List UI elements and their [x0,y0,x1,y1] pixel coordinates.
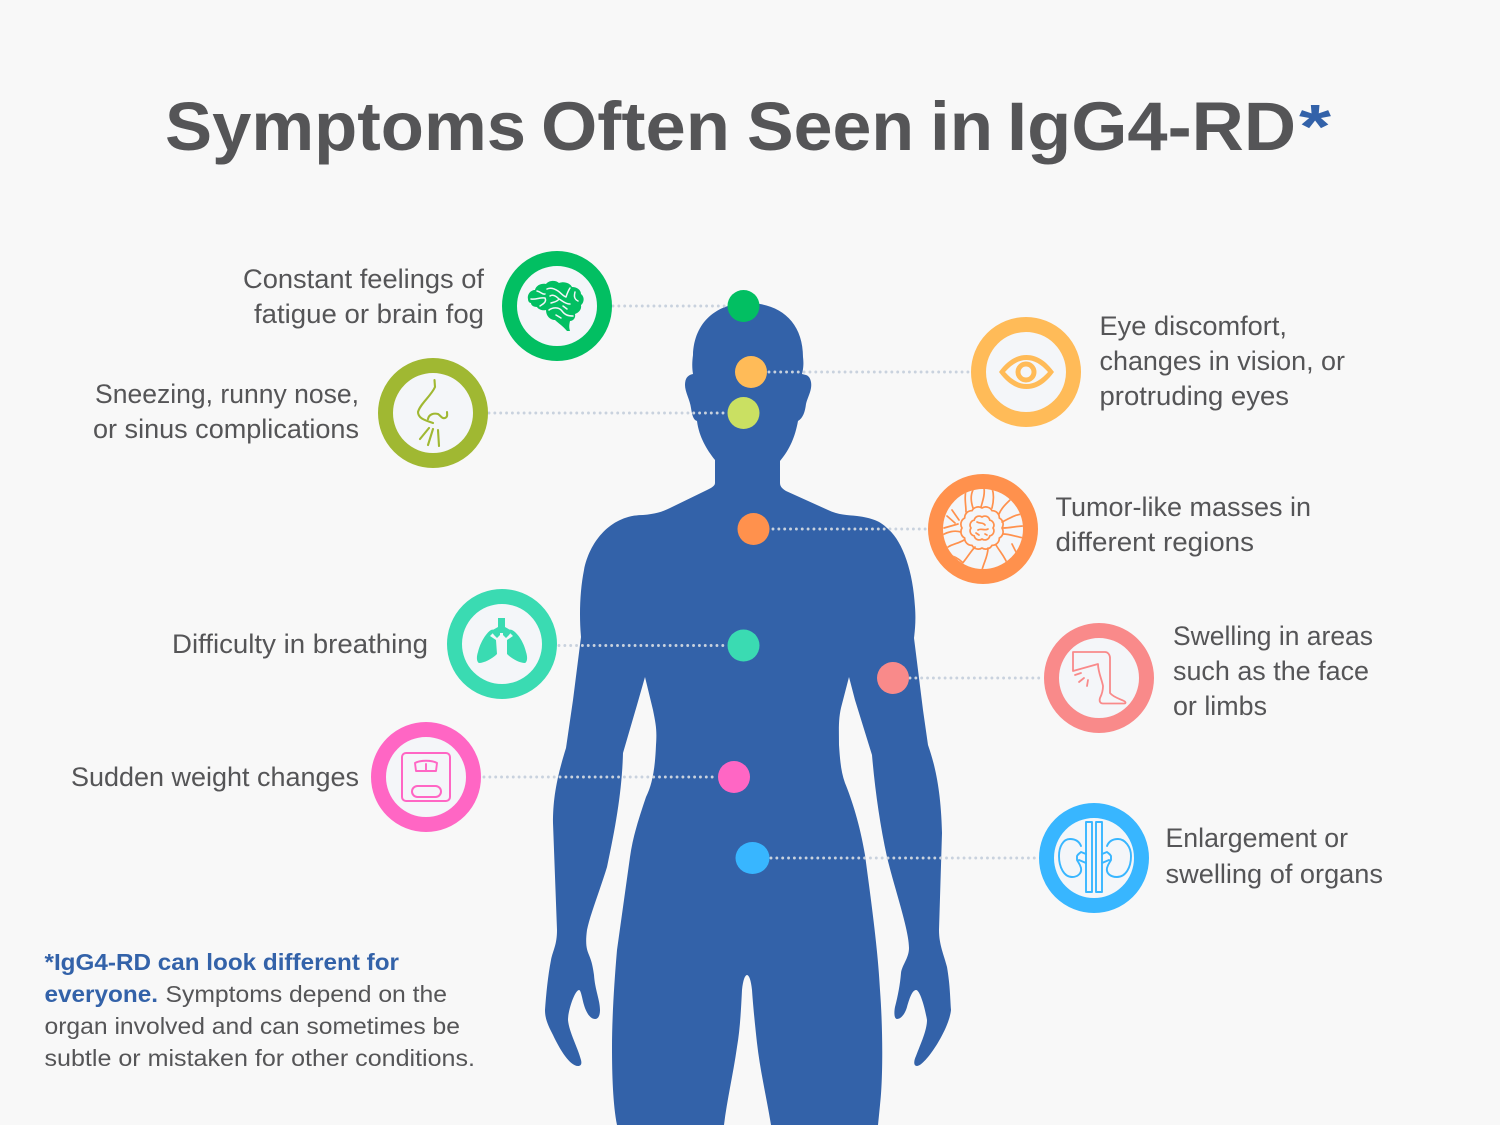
footnote: everyone. [44,981,158,1007]
label: fatigue: fatigue or brain fog [254,299,484,329]
title: Symptoms [165,88,526,165]
leader line: fatigue [613,305,728,307]
label: organs [1166,823,1383,889]
leader line: eye [769,371,970,373]
icon: swollen leg [1052,630,1146,726]
leader line: weight [484,776,716,778]
label: sinus [93,379,359,444]
marker dot: brain [728,290,760,322]
title: in [930,88,993,165]
marker dot: nose [728,397,760,429]
label: eye [1100,311,1345,411]
marker dot: eye [735,356,767,388]
title [165,88,1332,165]
icon: lungs [454,596,550,692]
icon: bathroom scale [378,730,474,824]
marker dot: organs [736,842,770,874]
label: tumor: Tumor-like masses in [1056,492,1311,522]
title: Often [541,88,730,165]
label: breathing: Difficulty in breathing [172,629,428,659]
leader line: nose [489,412,727,414]
title: * [1299,93,1332,162]
icon: brain [510,258,604,354]
label: sinus: or sinus complications [93,414,359,444]
icon: eye [978,324,1074,420]
marker dot: lungs [728,630,760,662]
label: eye: Eye discomfort, [1100,311,1287,341]
title: Seen [747,88,914,165]
label: swelling [1173,621,1373,721]
label: organs: swelling of organs [1166,859,1383,889]
leader line: organs [771,857,1038,859]
footnote: subtle or mistaken for other conditions. [44,1045,475,1071]
label: tumor [1056,492,1311,557]
label: fatigue: Constant feelings of [243,264,485,294]
icon: kidneys [1046,810,1142,906]
leader line: swelling [910,677,1043,679]
footnote: Symptoms depend on the [166,981,447,1007]
marker dot: swelling [877,662,909,694]
label: organs: Enlargement or [1166,823,1348,853]
human body silhouette [545,303,951,1125]
label: sinus: Sneezing, runny nose, [95,379,359,409]
leader line: tumor [773,528,927,530]
marker dot: weight [718,761,750,793]
label: swelling: such as the face [1173,656,1369,686]
label: eye: protruding eyes [1100,381,1289,411]
label: eye: changes in vision, or [1100,346,1345,376]
footnote [44,949,475,1071]
label: weight: Sudden weight changes [71,762,359,792]
title: IgG4-RD [1007,88,1296,165]
label: tumor: different regions [1056,527,1254,557]
icon: tumor [936,482,1030,576]
label: swelling: or limbs [1173,691,1267,721]
footnote: organ involved and can sometimes be [44,1013,460,1039]
label: fatigue [243,264,485,329]
marker dot: tumor [738,513,770,545]
icon: nose [386,366,480,460]
footnote: *IgG4-RD can look different for [44,949,399,975]
label: swelling: Swelling in areas [1173,621,1373,651]
leader line: breathing [559,644,727,647]
